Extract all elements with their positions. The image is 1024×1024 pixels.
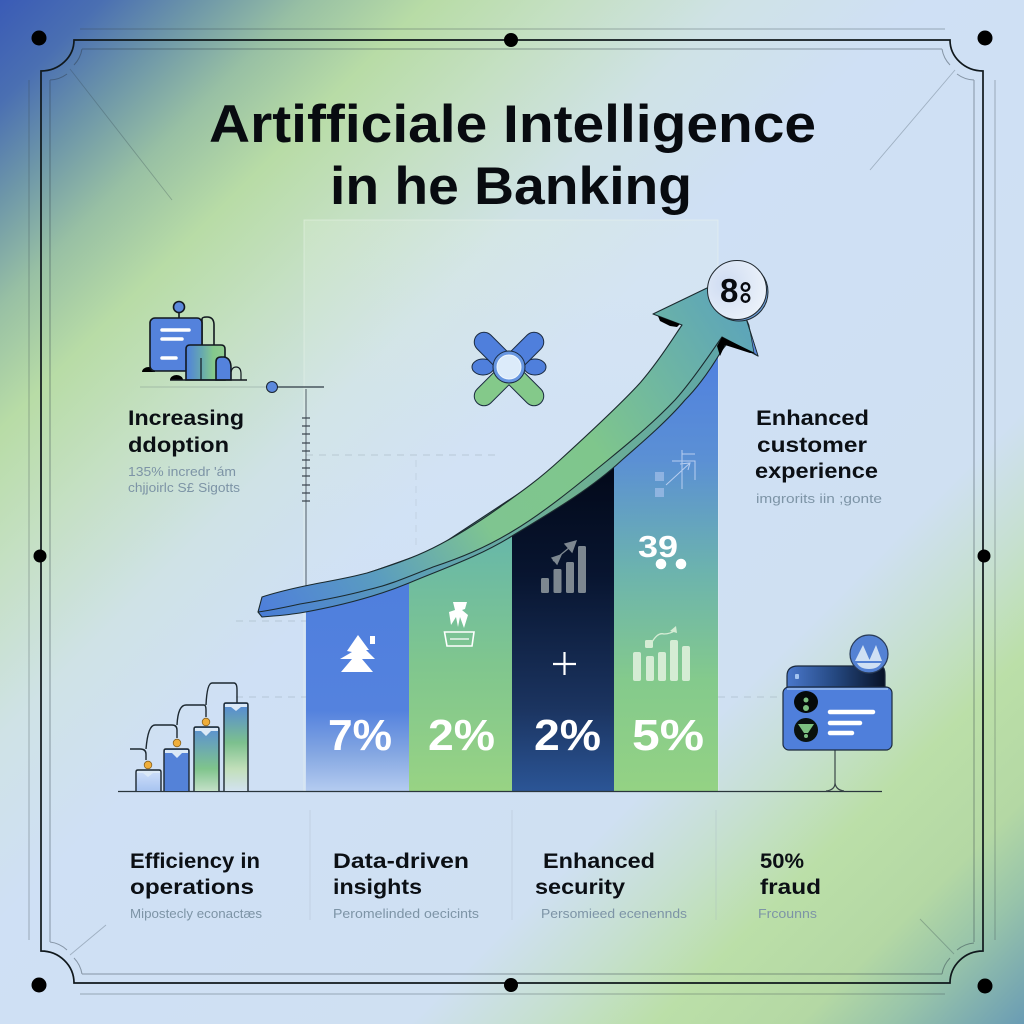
badge bbox=[708, 260, 768, 321]
bar 3 icons and value: 2% bbox=[534, 711, 601, 760]
text: increasing adoption bbox=[128, 407, 244, 495]
title bbox=[209, 95, 816, 216]
text: 50% fraud: 50% bbox=[760, 850, 804, 873]
icon: stepped bar chart with connectors bbox=[130, 683, 248, 791]
text: enhanced security bbox=[535, 850, 687, 921]
text: enhanced security: Persomieed ecenennds bbox=[541, 907, 687, 921]
text: enhanced customer experience: customer bbox=[757, 434, 867, 457]
arrow notch shadows bbox=[658, 316, 755, 356]
text: enhanced customer experience: Enhanced bbox=[756, 407, 869, 430]
connector with node bbox=[140, 382, 324, 392]
title: in he Banking bbox=[330, 157, 692, 216]
text: enhanced customer experience: experience bbox=[755, 460, 878, 483]
ticked axis bbox=[302, 389, 310, 590]
bar: 2% dark bbox=[512, 440, 614, 791]
bars bbox=[306, 330, 718, 791]
icon: mobile and document, increasing adoption bbox=[142, 302, 247, 380]
text: enhanced customer experience bbox=[755, 407, 882, 506]
text: enhanced customer experience: imgrorits iin ;gonte bbox=[756, 492, 882, 506]
guide lines bbox=[236, 455, 785, 697]
bar: 2% green bbox=[409, 520, 512, 791]
arrow head edge highlight bbox=[746, 318, 758, 356]
text: data-driven insights: Peromelinded oecicints bbox=[333, 907, 479, 921]
badge: 8 bbox=[720, 272, 738, 309]
text: increasing adoption: 135% incredr 'ám bbox=[128, 465, 236, 479]
bar: 7% bbox=[306, 580, 409, 791]
center flower icon bbox=[472, 342, 546, 396]
bar 4 icons and values: 39 bbox=[638, 529, 678, 564]
text: efficiency in operations: operations bbox=[130, 876, 254, 899]
text: data-driven insights bbox=[333, 850, 479, 921]
bar 1 icon and value bbox=[328, 635, 392, 760]
text: enhanced security: security bbox=[535, 876, 625, 899]
text: data-driven insights: Data-driven bbox=[333, 850, 469, 873]
text: increasing adoption: ddoption bbox=[128, 434, 229, 457]
bar 3 icons and value bbox=[534, 541, 601, 760]
text: increasing adoption: Increasing bbox=[128, 407, 244, 430]
text: efficiency in operations: Efficiency in bbox=[130, 850, 260, 873]
icon: wallet card bbox=[783, 635, 892, 791]
text: increasing adoption: chjjoirlc S£ Sigotts bbox=[128, 481, 240, 495]
title: Artifficiale Intelligence bbox=[209, 95, 816, 154]
text: efficiency in operations bbox=[130, 850, 262, 921]
bar 2 icon and value bbox=[428, 602, 495, 760]
bar 4 icons and values bbox=[632, 450, 704, 760]
bar: 5% bbox=[614, 330, 718, 791]
arrow top face bbox=[258, 288, 758, 612]
bar 2 icon and value: 2% bbox=[428, 711, 495, 760]
text: enhanced security: Enhanced bbox=[543, 850, 655, 873]
text: 50% fraud: Frcounns bbox=[758, 907, 817, 921]
text: efficiency in operations: Mipostecly econactæs bbox=[130, 907, 262, 921]
text: 50% fraud bbox=[758, 850, 821, 921]
translucent chart panel bbox=[304, 220, 718, 791]
growth arrow bbox=[258, 288, 758, 617]
bar 1 icon and value: 7% bbox=[328, 711, 392, 760]
bar 4 icons and values: 5% bbox=[632, 711, 704, 760]
text: data-driven insights: insights bbox=[333, 876, 422, 899]
arrow underside bbox=[258, 337, 726, 617]
baseline bbox=[118, 790, 882, 792]
text: 50% fraud: fraud bbox=[760, 876, 821, 899]
